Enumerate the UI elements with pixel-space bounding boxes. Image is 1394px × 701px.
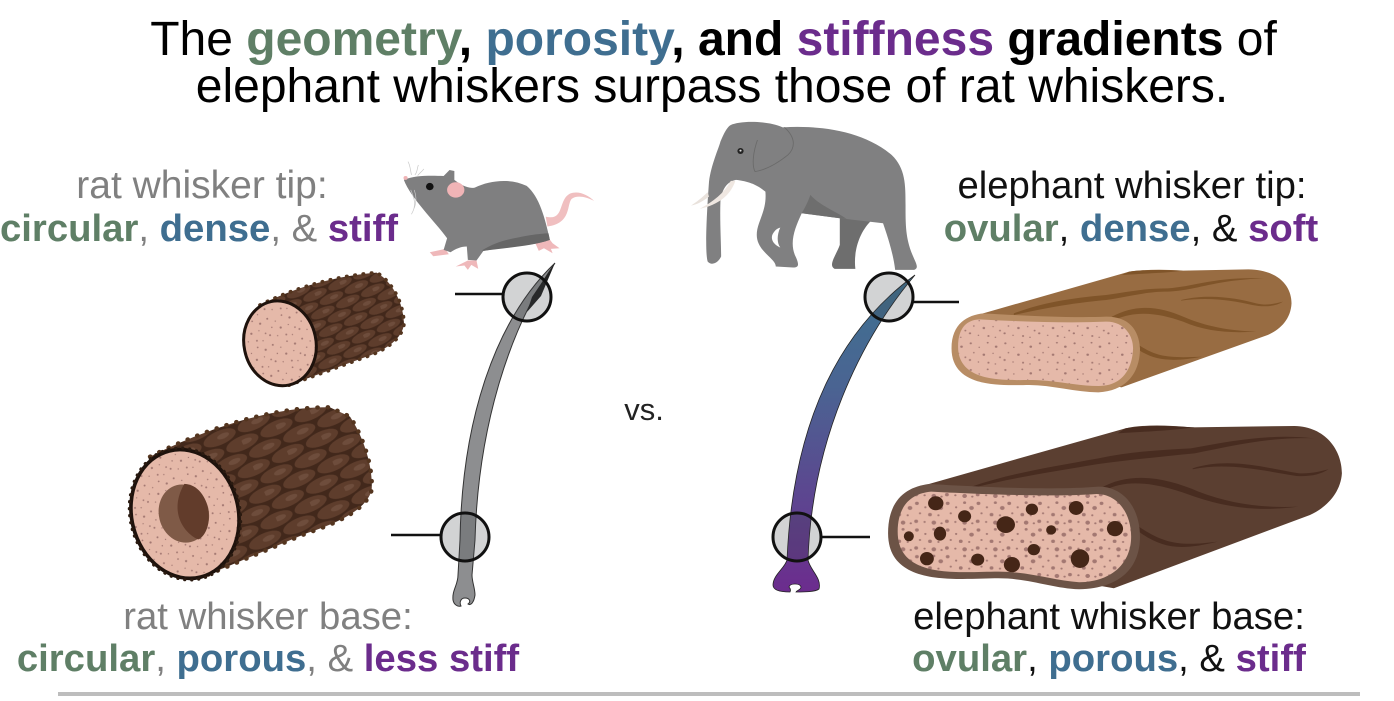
elephant tip body [983,269,1292,387]
label: rat whisker base: circular, porous, & less stiff [17,637,519,680]
label: rat whisker tip [0,164,398,250]
panel: rat tip cross-section [236,273,404,393]
elephant base pores [904,496,1123,572]
rat tip cut face [236,294,324,393]
title [150,13,1277,113]
elephant tip marker [865,273,959,321]
rat base marker [391,513,489,561]
label: rat whisker tip: circular, dense, & stiff [0,207,398,250]
label: elephant whisker base: ovular, porous, & stiff [912,637,1306,680]
label: elephant whisker base [912,595,1306,680]
panel: rat base cross-section [116,407,372,592]
label: rat whisker tip: rat whisker tip: [76,164,328,207]
elephant tip rim [952,313,1140,392]
rat whisker [453,263,555,606]
panel: elephant base cross-section [888,426,1342,589]
icon: rat [403,162,594,270]
elephant base marker [773,513,870,561]
title: The geometry, porosity, and stiffness gradients of [150,13,1277,66]
rat base cut face [116,436,254,592]
label: vs: vs. [624,392,664,427]
rat base scaly cylinder [150,407,372,577]
label: elephant whisker base: elephant whisker base: [913,595,1305,638]
elephant base rim [888,484,1140,589]
label: elephant whisker tip [944,164,1319,250]
rat tip marker [455,273,551,321]
elephant base face [898,492,1131,582]
panel: elephant tip cross-section [952,269,1292,392]
rat tip scaly cylinder [260,273,404,386]
title: elephant whiskers surpass those of rat whiskers. [196,60,1228,113]
label: elephant whisker tip: elephant whisker tip: [957,164,1307,207]
elephant tip face [958,319,1133,386]
elephant base grooves [972,426,1328,547]
label: rat whisker base [17,595,519,680]
elephant base body [925,426,1342,588]
bottom rule [58,692,1360,696]
elephant whisker [773,275,915,592]
elephant tip grooves [1014,270,1283,360]
label: elephant whisker tip: ovular, dense, & soft [944,207,1319,250]
icon: elephant [691,122,917,270]
label: rat whisker base: rat whisker base: [123,595,413,638]
